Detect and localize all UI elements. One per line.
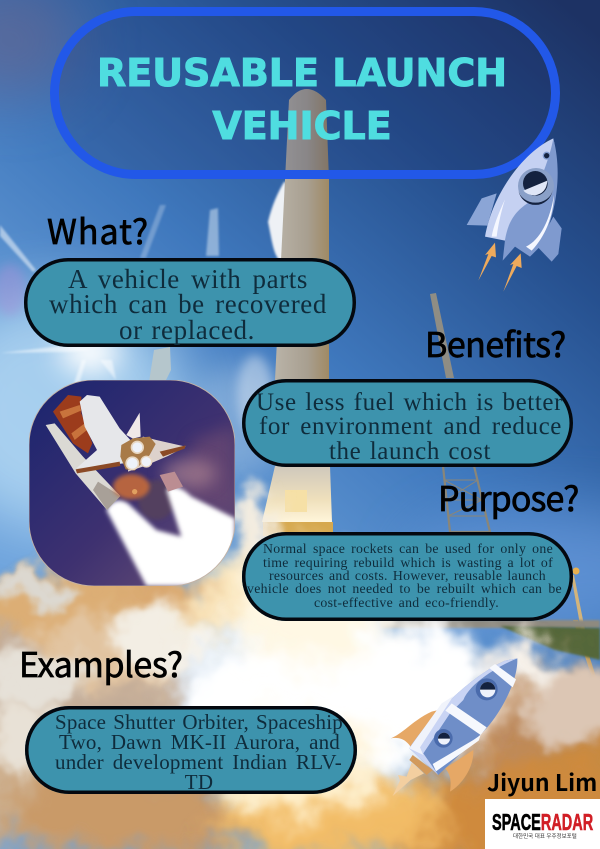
title text: VEHICLE	[212, 104, 392, 148]
panel: what	[24, 258, 356, 347]
heading: Purpose?: Purpose?	[438, 472, 578, 521]
picture: space shuttle launch	[29, 380, 235, 586]
title text: REUSABLE LAUNCH	[97, 51, 507, 95]
exhaust beside rocket	[268, 182, 286, 262]
panel: purpose: resources and costs. However, reusable launch	[269, 568, 546, 583]
panel: purpose: cost-effective and eco-friendly.	[314, 595, 499, 610]
panel: examples: Two, Dawn MK-II Aurora, and	[59, 730, 340, 754]
panel: purpose: Normal space rockets can be used for only one	[263, 541, 553, 556]
panel: examples	[25, 706, 357, 794]
horizon	[380, 620, 600, 660]
logo wordmark: SPACERADAR	[492, 809, 593, 835]
panel: examples: under development Indian RLV-	[55, 750, 342, 774]
logo: Space Radar	[485, 799, 600, 849]
panel: purpose: vehicle does not needed to be rebuilt which can be	[247, 581, 562, 596]
title text	[97, 51, 507, 148]
heading: Examples?: Examples?	[19, 638, 183, 687]
title banner	[50, 7, 560, 179]
panel: examples: TD	[185, 770, 213, 794]
panel: benefits	[242, 379, 573, 467]
panel: what: A vehicle with parts	[68, 264, 308, 294]
heading: What?: What?	[47, 205, 149, 254]
panel: examples: Space Shutter Orbiter, Spaceship	[55, 710, 343, 734]
panel: purpose	[242, 532, 573, 621]
clouds	[0, 484, 600, 849]
panel: benefits: Use less fuel which is better	[256, 389, 563, 416]
panel: purpose: time requiring rebuild which is wasting a lot of	[263, 555, 553, 570]
launch towers	[149, 293, 600, 690]
panel: what: which can be recovered	[49, 288, 327, 318]
icon: blue rocket top right	[466, 138, 562, 292]
panel: benefits: the launch cost	[329, 438, 491, 465]
logo tagline: 대한민국 대표 우주정보포털	[513, 834, 577, 840]
panel: benefits: for environment and reduce	[259, 413, 562, 440]
heading: Benefits?: Benefits?	[425, 318, 566, 367]
panel: what: or replaced.	[119, 314, 255, 344]
icon: striped rocket bottom	[40, 658, 518, 796]
rocket	[262, 89, 333, 536]
author name: Jiyun Lim	[487, 764, 597, 798]
